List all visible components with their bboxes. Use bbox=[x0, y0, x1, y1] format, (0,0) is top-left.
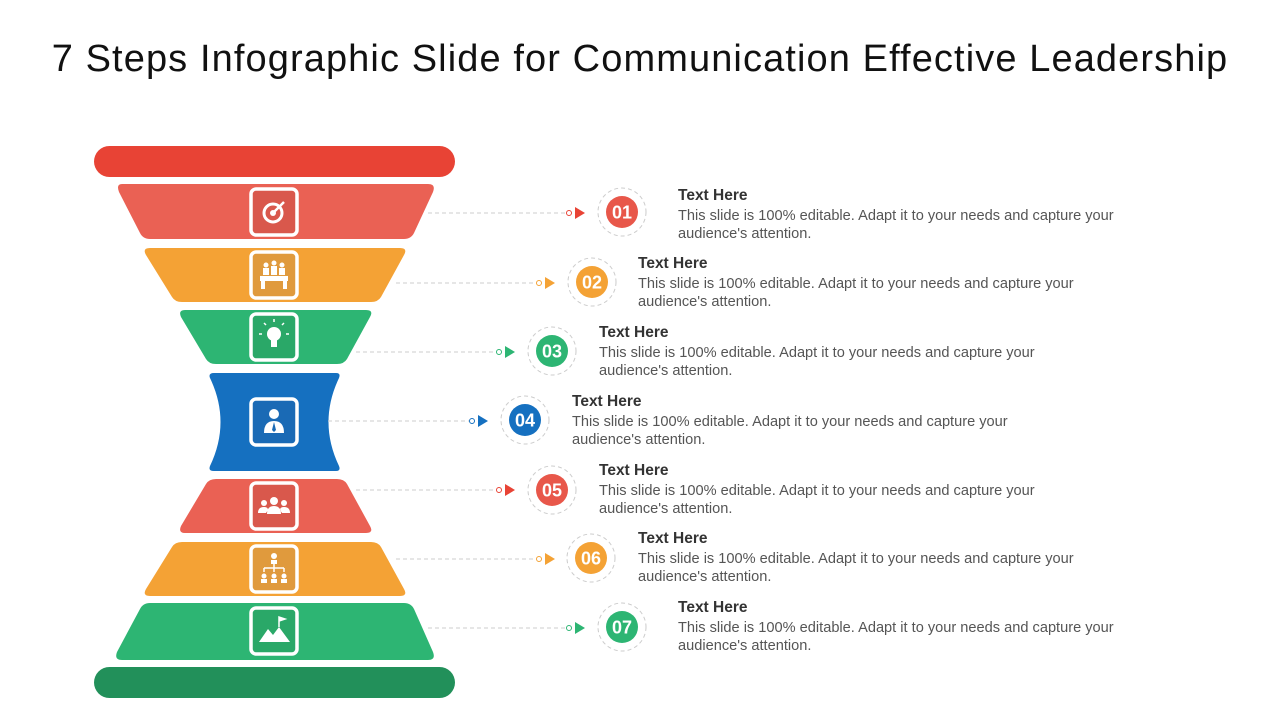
markers: 02 bbox=[582, 272, 602, 292]
step 3 text: This slide is 100% editable. Adapt it to your needs and capture your audience's attention. bbox=[599, 345, 1035, 379]
band 2 bbox=[145, 248, 405, 302]
icon: mountain flag bbox=[251, 608, 297, 654]
icon: org chart bbox=[251, 546, 297, 592]
band 1 bbox=[118, 184, 434, 239]
step 2 text bbox=[638, 255, 1074, 310]
step 4 text: This slide is 100% editable. Adapt it to your needs and capture your audience's attention. bbox=[572, 414, 1008, 448]
band 4 bbox=[210, 373, 340, 471]
step 5 text bbox=[599, 462, 1035, 517]
top bar bbox=[94, 146, 455, 177]
markers: 05 bbox=[542, 480, 562, 500]
icon: leader bbox=[251, 399, 297, 445]
step 1 text: Text Here bbox=[678, 187, 748, 204]
markers: 03 bbox=[542, 342, 562, 362]
band 3 bbox=[180, 310, 371, 364]
step 1 text: This slide is 100% editable. Adapt it to your needs and capture your audience's attention. bbox=[678, 208, 1114, 242]
markers: 07 bbox=[612, 618, 632, 638]
step 4 text: Text Here bbox=[572, 393, 642, 410]
band 5 bbox=[180, 479, 371, 533]
icon: meeting bbox=[251, 252, 297, 298]
band 7 bbox=[116, 603, 434, 660]
step 2 text: Text Here bbox=[638, 255, 708, 272]
band 6 bbox=[145, 542, 405, 596]
icon: lightbulb bbox=[251, 314, 297, 360]
step 7 text: This slide is 100% editable. Adapt it to your needs and capture your audience's attention. bbox=[678, 620, 1114, 654]
step 1 text bbox=[678, 187, 1114, 242]
step 6 text: This slide is 100% editable. Adapt it to your needs and capture your audience's attention. bbox=[638, 551, 1074, 585]
markers bbox=[470, 196, 638, 643]
markers: 04 bbox=[515, 410, 535, 430]
icon: team bbox=[251, 483, 297, 529]
step 3 text: Text Here bbox=[599, 324, 668, 341]
step 7 text: Text Here bbox=[678, 599, 748, 616]
step 6 text bbox=[638, 530, 1074, 585]
step 5 text: Text Here bbox=[599, 462, 668, 479]
step 2 text: This slide is 100% editable. Adapt it to your needs and capture your audience's attention. bbox=[638, 276, 1074, 310]
step 5 text: This slide is 100% editable. Adapt it to your needs and capture your audience's attention. bbox=[599, 483, 1035, 517]
step 6 text: Text Here bbox=[638, 530, 708, 547]
markers: 06 bbox=[581, 548, 601, 568]
step 3 text bbox=[599, 324, 1035, 379]
icon: target bbox=[251, 189, 297, 235]
title: 7 Steps Infographic Slide for Communication Effective Leadership bbox=[52, 38, 1228, 80]
step 4 text bbox=[572, 393, 1008, 448]
bottom bar bbox=[94, 667, 455, 698]
step 7 text bbox=[678, 599, 1114, 654]
markers: 01 bbox=[612, 202, 632, 222]
